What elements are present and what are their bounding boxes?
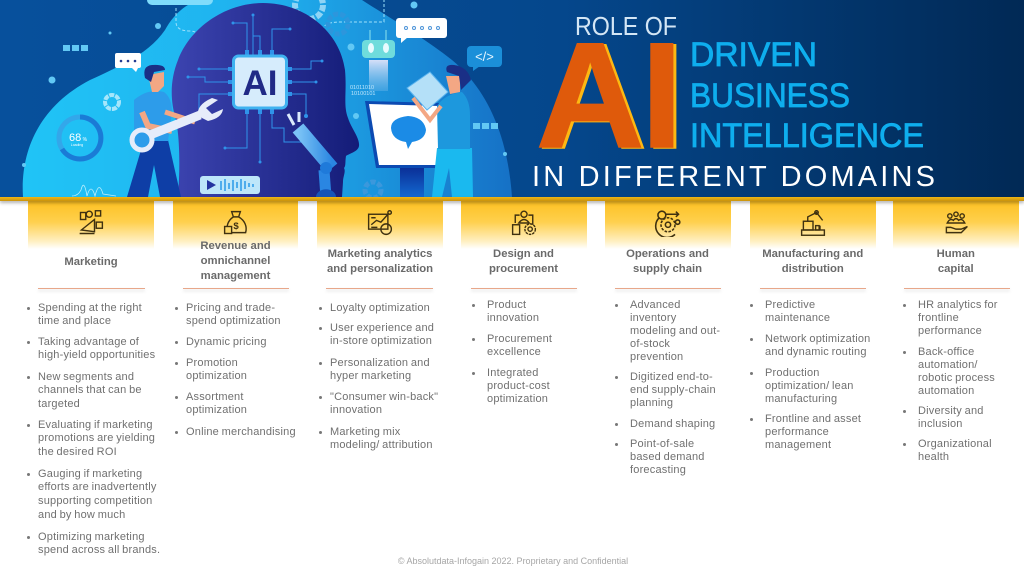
banner [0,0,1024,197]
title: AI shadow: A [539,12,647,180]
footer: © Absolutdata-Infogain 2022. Proprietary and Confidential [398,556,628,566]
item: optimization [186,370,247,382]
item: inventory [630,312,676,324]
AI chip [234,56,286,108]
divider [326,288,433,289]
heading [327,248,433,274]
item [765,413,861,452]
panel: marketing [27,201,160,556]
wave line [72,185,116,196]
item: spend optimization [186,315,281,327]
item [27,370,142,410]
item: performance [918,325,982,337]
item: Promotion [186,356,238,368]
item: optimization [186,404,247,416]
item: end supply-chain [630,384,716,396]
item: Advanced [630,299,681,311]
header band [28,200,154,249]
loading gauge [59,117,101,159]
item: product-cost [487,380,550,392]
title: AI: I [641,11,683,179]
audio player [200,176,260,194]
divider [183,288,289,289]
gear lower right [365,182,381,198]
title: driven business intelligence: INTELLIGENCE [690,117,924,155]
item: optimization [487,393,548,405]
item: robotic process [918,372,995,384]
title: role of: ROLE OF [575,11,677,41]
item: supporting competition [38,495,152,507]
item: health [918,451,949,463]
illustration: AI head and engineers [22,0,512,198]
gear icon [105,95,119,109]
item: Point-of-sale [630,438,694,450]
item [27,302,142,327]
speech bubble: left [115,53,141,72]
heading: and personalization [327,262,433,274]
item [175,356,247,382]
panel: design and procurement [461,201,587,405]
heading: Manufacturing and [762,248,863,260]
icon: money bag: $ [233,221,239,232]
item: and dynamic routing [765,346,867,358]
list [27,302,160,556]
blob background [23,0,512,197]
item [630,371,716,410]
heading: omnichannel [201,255,270,267]
item [918,405,984,431]
item [27,530,160,556]
speech bubble: dots [396,18,447,43]
title: driven business intelligence: BUSINESS [690,77,850,115]
item: modeling and out- [630,325,720,337]
item [472,367,550,405]
icon: people on a hand [942,209,970,237]
item: Assortment [186,390,244,402]
item: Procurement [487,333,552,345]
display board with brain [365,101,440,197]
heading: Operations and [626,248,709,260]
icon: marketing megaphone [80,210,104,234]
panel: marketing analytics [317,201,443,451]
item [175,302,281,327]
item [765,333,870,359]
item: innovation [487,312,539,324]
panel: operations [605,201,731,476]
divider [904,288,1010,289]
heading: procurement [489,262,558,274]
circuit traces [188,15,322,162]
item: spend across all brands. [38,544,160,556]
dashed connectors [176,0,384,185]
item: excellence [487,346,541,358]
heading: management [201,270,270,282]
heading [740,246,886,276]
item [472,299,539,324]
item: HR analytics for [918,299,998,311]
item [27,336,155,361]
item: based demand [630,451,705,463]
list [918,299,1018,464]
binary text: 01011010 [350,85,374,91]
list [472,299,552,405]
loading gauge: 68 % [69,132,88,144]
item: Evaluating if marketing [38,418,153,430]
item: frontline [918,312,959,324]
item: in-store optimization [330,335,432,347]
item: Digitized end-to- [630,371,713,383]
item: maintenance [765,312,830,324]
header band [173,200,298,249]
heading: Revenue and [200,240,271,252]
list [175,302,296,438]
robot [362,30,395,91]
heading: capital [938,262,974,274]
gears behind head [295,0,323,19]
item [319,322,434,347]
panel: manufacturing [750,198,876,558]
item: planning [630,397,673,409]
decorative dots and squares [22,2,507,167]
icon: design person and gear [512,210,536,236]
title: AI shadow: I [644,12,686,180]
code bubble [467,46,502,71]
item [765,367,854,406]
item [319,426,433,451]
item [27,468,157,521]
title: driven business intelligence: DRIVEN [690,36,817,74]
item: Pricing and trade- [186,302,275,314]
item: Taking advantage of [38,336,139,348]
engineer with tablet [407,65,473,197]
item: high-yield opportunities [38,349,155,361]
title: driven business intelligence [690,36,924,155]
item: prevention [630,351,683,363]
header band [460,200,586,249]
item [319,356,430,382]
header band [750,200,876,249]
item [319,390,438,416]
item: Back-office [918,346,974,358]
item: Production [765,367,820,379]
item: "Consumer win-back" [330,390,438,402]
item: Dynamic pricing [186,336,267,348]
AI chip: AI [242,64,278,103]
item [918,346,995,398]
item: Organizational [918,438,992,450]
item: promotions are yielding [38,432,155,444]
divider [38,288,145,289]
item: optimization/ lean [765,380,854,392]
divider [470,288,576,289]
divider [760,288,866,289]
engineer with wrench [127,65,223,197]
heading: supply chain [633,262,702,274]
heading [200,240,271,282]
panel: human capital [893,198,1018,558]
heading: distribution [782,262,844,274]
item: innovation [330,404,382,416]
code bubble: </> [475,49,494,64]
item: Spending at the right [38,302,142,314]
item: Marketing mix [330,426,400,438]
heading: Design and [493,248,554,260]
item: performance [765,426,829,438]
item: Product [487,299,526,311]
title: in different domains: IN DIFFERENT DOMAINS [532,161,935,193]
item: Loyalty optimization [330,302,430,314]
item [765,299,830,325]
item: manufacturing [765,393,837,405]
item [630,438,705,477]
item: automation/ [918,359,978,371]
item: efforts are inadvertently [38,481,157,493]
gold divider bar [0,197,1024,201]
item: Optimizing marketing [38,530,145,542]
item: the desired ROI [38,446,117,458]
item [918,438,992,464]
item [630,299,720,364]
item: hyper marketing [330,370,411,382]
heading: Marketing [64,256,118,268]
item: of-stock [630,338,670,350]
icon: operations gears [654,210,681,237]
title: AI: A [536,11,644,179]
item [472,333,552,358]
loading gauge: Loading [71,143,83,147]
item: automation [918,385,974,397]
item: Frontline and asset [765,413,861,425]
item: New segments and [38,370,134,382]
item: Personalization and [330,356,430,368]
title [532,11,935,193]
icon: money bag [224,210,247,234]
heading [883,246,1024,276]
divider [615,288,721,289]
binary text: 10100101 [351,91,375,97]
list [319,302,438,451]
list [615,299,720,476]
item: modeling/ attribution [330,439,433,451]
icon: analytics chart [368,210,392,236]
item: management [765,439,831,451]
heading [489,248,558,274]
header band [604,200,730,249]
header band [893,200,1018,249]
item: Gauging if marketing [38,468,142,480]
item: Demand shaping [630,418,715,430]
item: Integrated [487,367,539,379]
item: inclusion [918,418,963,430]
top bubble [147,0,213,5]
item: Network optimization [765,333,870,345]
header band [317,200,443,249]
item: Online merchandising [186,426,296,438]
heading: Human [937,248,975,260]
icon: robot arm factory [799,209,827,237]
head silhouette [172,3,359,197]
item: targeted [38,398,80,410]
robot arm [288,112,336,197]
item [175,390,247,416]
list [765,299,877,452]
item: time and place [38,315,111,327]
heading: Marketing analytics [328,248,432,260]
item: and by how much [38,509,125,521]
item [27,418,155,458]
item [918,299,998,338]
item: Diversity and [918,405,984,417]
item: User experience and [330,322,434,334]
item: Predictive [765,299,815,311]
item: forecasting [630,464,686,476]
panel: revenue [173,201,298,438]
item: channels that can be [38,384,142,396]
heading [626,248,709,274]
